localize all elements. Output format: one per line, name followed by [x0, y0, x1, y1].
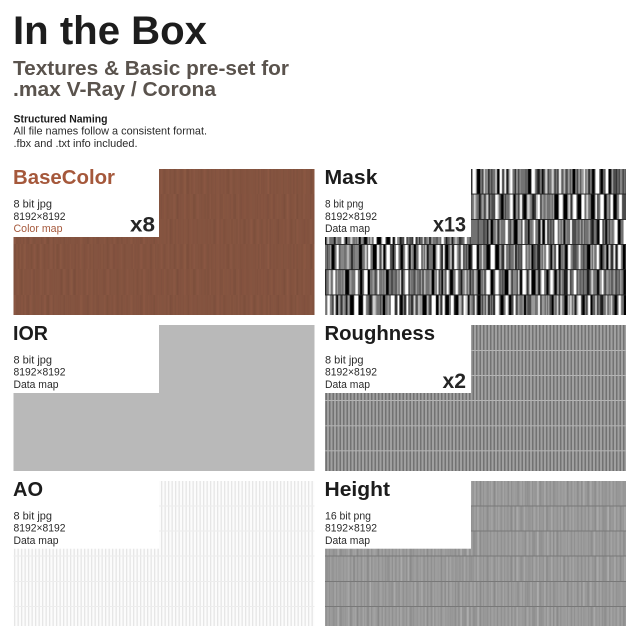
panel: AO: [0, 476, 314, 626]
heading: Roughness: Roughness: [324, 323, 435, 345]
panel: Height: [320, 476, 626, 626]
spec text: Data map: [14, 379, 58, 391]
spec text: 8192×8192: [14, 367, 66, 379]
texture: mottled grey stripes: [320, 476, 626, 626]
text block: structured naming: All file names follow a consistent format.: [14, 126, 207, 138]
spec text: 16 bit png: [325, 510, 371, 522]
spec text: Data map: [325, 223, 370, 235]
texture: grey fine stripes: [320, 320, 626, 471]
spec text: 8192×8192: [14, 211, 66, 223]
panel: BaseColor: [0, 160, 314, 315]
count: x13: x13: [433, 214, 466, 236]
subtitle: .max V-Ray / Corona: [13, 79, 217, 101]
panel: IOR: [13, 323, 314, 471]
spec text: [325, 199, 377, 235]
count: x8: x8: [130, 214, 155, 236]
heading: AO: AO: [13, 479, 43, 501]
spec text: Data map: [325, 535, 370, 547]
spec text: 8192×8192: [14, 523, 66, 535]
spec text: 8192×8192: [325, 523, 377, 535]
spec text: [325, 510, 377, 547]
spec text: [14, 354, 66, 391]
heading: Height: Height: [324, 479, 390, 501]
text block: structured naming: .fbx and .txt info included.: [14, 138, 138, 150]
spec text: Data map: [14, 535, 58, 547]
spec text: Data map: [325, 379, 370, 391]
spec text: 8 bit jpg: [14, 354, 52, 366]
title: In the Box: [13, 9, 207, 53]
heading: BaseColor: BaseColor: [13, 167, 115, 189]
text block: structured naming: Structured Naming: [14, 114, 108, 126]
panel: Roughness: [320, 320, 626, 471]
spec text: 8 bit png: [325, 199, 364, 211]
spec text: [325, 354, 377, 391]
spec text: 8 bit jpg: [14, 199, 52, 211]
text block: structured naming: [14, 114, 207, 150]
texture: black and white stripes: [320, 160, 626, 315]
texture: pale stripes: [0, 476, 314, 626]
spec text: 8 bit jpg: [14, 510, 52, 522]
spec text: 8192×8192: [325, 367, 377, 379]
heading: Mask: Mask: [324, 167, 378, 189]
heading: IOR: IOR: [13, 323, 49, 345]
subtitle: [13, 58, 289, 101]
subtitle: Textures & Basic pre-set for: [13, 58, 289, 80]
spec text: [14, 199, 66, 235]
spec text: 8192×8192: [325, 211, 377, 223]
spec text: Color map: [14, 223, 62, 235]
spec text: [14, 510, 66, 547]
texture: flat grey map: [14, 325, 314, 471]
panel: Mask: [320, 160, 626, 315]
count: x2: x2: [442, 370, 466, 393]
texture: brown tile map: [0, 160, 314, 315]
spec text: 8 bit jpg: [325, 354, 364, 366]
